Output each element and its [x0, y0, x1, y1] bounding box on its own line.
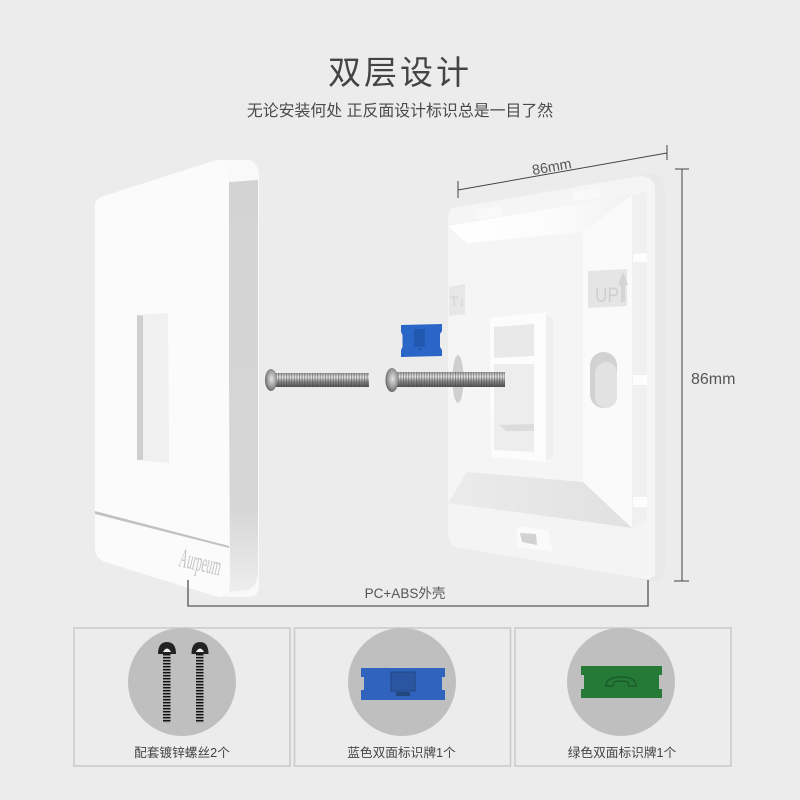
height dimension: 86mm	[691, 371, 735, 388]
left screw	[265, 369, 369, 391]
panel: screws	[74, 628, 290, 766]
width dimension	[458, 145, 667, 198]
panel: screws: 配套镀锌螺丝2个	[134, 745, 230, 760]
plate logo: Aurpeum	[177, 544, 224, 582]
back shell	[448, 174, 665, 581]
front cover plate	[95, 160, 259, 597]
right screw	[386, 368, 505, 392]
top tabs	[475, 188, 600, 219]
panel: blue tag: 蓝色双面标识牌1个	[347, 745, 456, 760]
left UP label recess: T↓	[450, 293, 466, 309]
right screw hole	[590, 352, 617, 408]
plate groove	[95, 511, 229, 548]
material bracket	[188, 580, 648, 606]
width dimension: 86mm	[531, 156, 573, 179]
shell right face	[583, 195, 632, 528]
panel: green tag	[515, 628, 731, 766]
side tabs	[633, 253, 647, 507]
shell top bevel	[448, 195, 632, 243]
left UP label recess	[449, 284, 466, 316]
shell right channel	[632, 192, 647, 528]
UP label recess: UP	[595, 284, 619, 307]
icon: green tag	[581, 666, 662, 698]
icon: two screws	[158, 642, 208, 723]
material bracket: PC+ABS外壳	[365, 586, 445, 601]
plate face	[95, 160, 230, 597]
jack frame	[490, 312, 553, 462]
shell outer rim	[636, 174, 665, 581]
panel: blue tag	[294, 628, 510, 766]
blue label tag	[401, 324, 442, 357]
height dimension	[674, 169, 735, 581]
shell bottom bevel	[448, 472, 632, 528]
shell bottom lip	[448, 503, 647, 578]
panel: green tag: 绿色双面标识牌1个	[568, 745, 677, 760]
title: 双层设计	[328, 54, 472, 91]
left screw hole	[452, 355, 464, 403]
plate side edge	[218, 160, 259, 597]
plate window cutout	[137, 313, 169, 463]
UP label recess	[588, 269, 628, 308]
shell body	[448, 176, 655, 579]
bottom clip	[516, 527, 553, 552]
icon: blue tag	[361, 668, 445, 700]
subtitle: 无论安装何处 正反面设计标识总是一目了然	[247, 102, 553, 120]
